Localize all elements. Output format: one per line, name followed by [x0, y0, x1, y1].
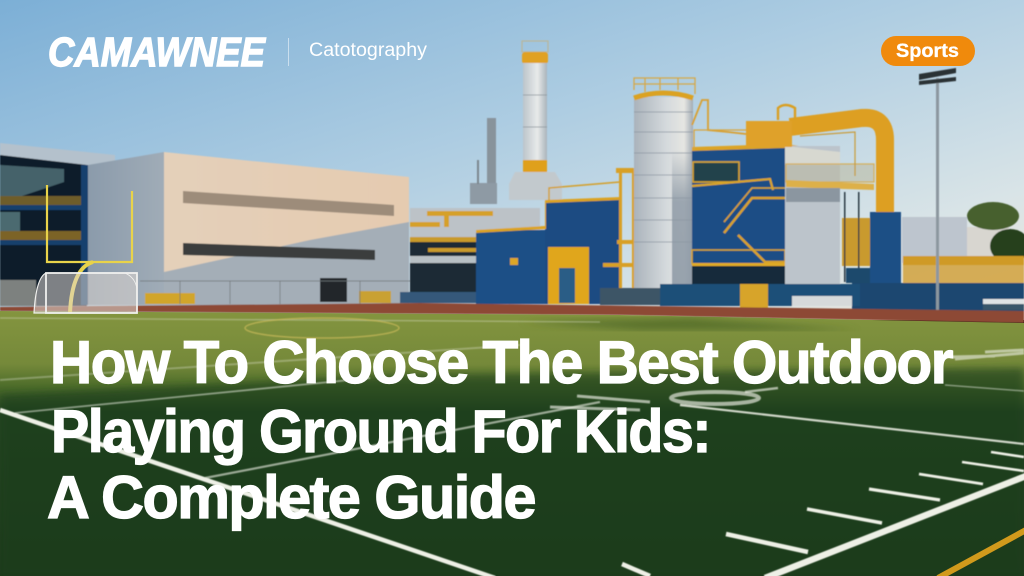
base fence and lower plant	[600, 284, 860, 308]
main title: A Complete Guide	[47, 464, 535, 531]
blue perimeter wall	[852, 283, 1024, 313]
main title	[47, 329, 953, 531]
running track	[0, 303, 1024, 323]
floodlight pole	[919, 68, 956, 312]
bench	[983, 299, 1024, 310]
sky background	[0, 0, 1024, 320]
main blue plant block	[692, 144, 840, 284]
yard number	[550, 388, 778, 410]
cylindrical silo	[634, 78, 695, 298]
blue pipe column	[870, 212, 901, 284]
tall chimney	[509, 41, 562, 200]
left glass building	[0, 143, 115, 306]
soccer goal	[34, 273, 137, 313]
trees	[967, 202, 1024, 263]
centre circle	[245, 318, 399, 338]
yellow scaffold tower	[600, 168, 642, 293]
yellow boundary line	[938, 530, 1024, 576]
back plant building	[400, 208, 540, 303]
right end marks	[950, 350, 1024, 359]
thin exhaust stack	[470, 118, 497, 204]
beige warehouse front wall	[140, 152, 410, 305]
main title: Playing Ground For Kids:	[51, 398, 710, 465]
right low building	[902, 217, 1009, 263]
turf field	[0, 311, 1024, 576]
blue plant block with yellow door	[476, 182, 622, 304]
sports badge	[881, 36, 975, 66]
right sideline	[765, 476, 1024, 576]
grey warehouse side wall	[88, 152, 164, 305]
logo subtitle: Catotography	[309, 40, 428, 61]
light wall with balcony	[785, 146, 892, 286]
logo wordmark: CAMAWNEE	[48, 29, 266, 75]
sports badge: Sports	[896, 41, 959, 62]
field shadow band	[0, 318, 1024, 576]
scene: buildings and stadium	[0, 41, 1024, 323]
hash marks	[622, 452, 1024, 576]
left sideline	[0, 410, 495, 576]
field markings	[0, 318, 1024, 576]
yellow overhead pipe	[692, 100, 885, 212]
football goalpost	[47, 185, 132, 313]
logo divider	[288, 38, 289, 66]
yard lines	[0, 318, 1024, 478]
main title: How To Choose The Best Outdoor	[50, 329, 953, 396]
yellow low pipes	[903, 256, 1024, 283]
